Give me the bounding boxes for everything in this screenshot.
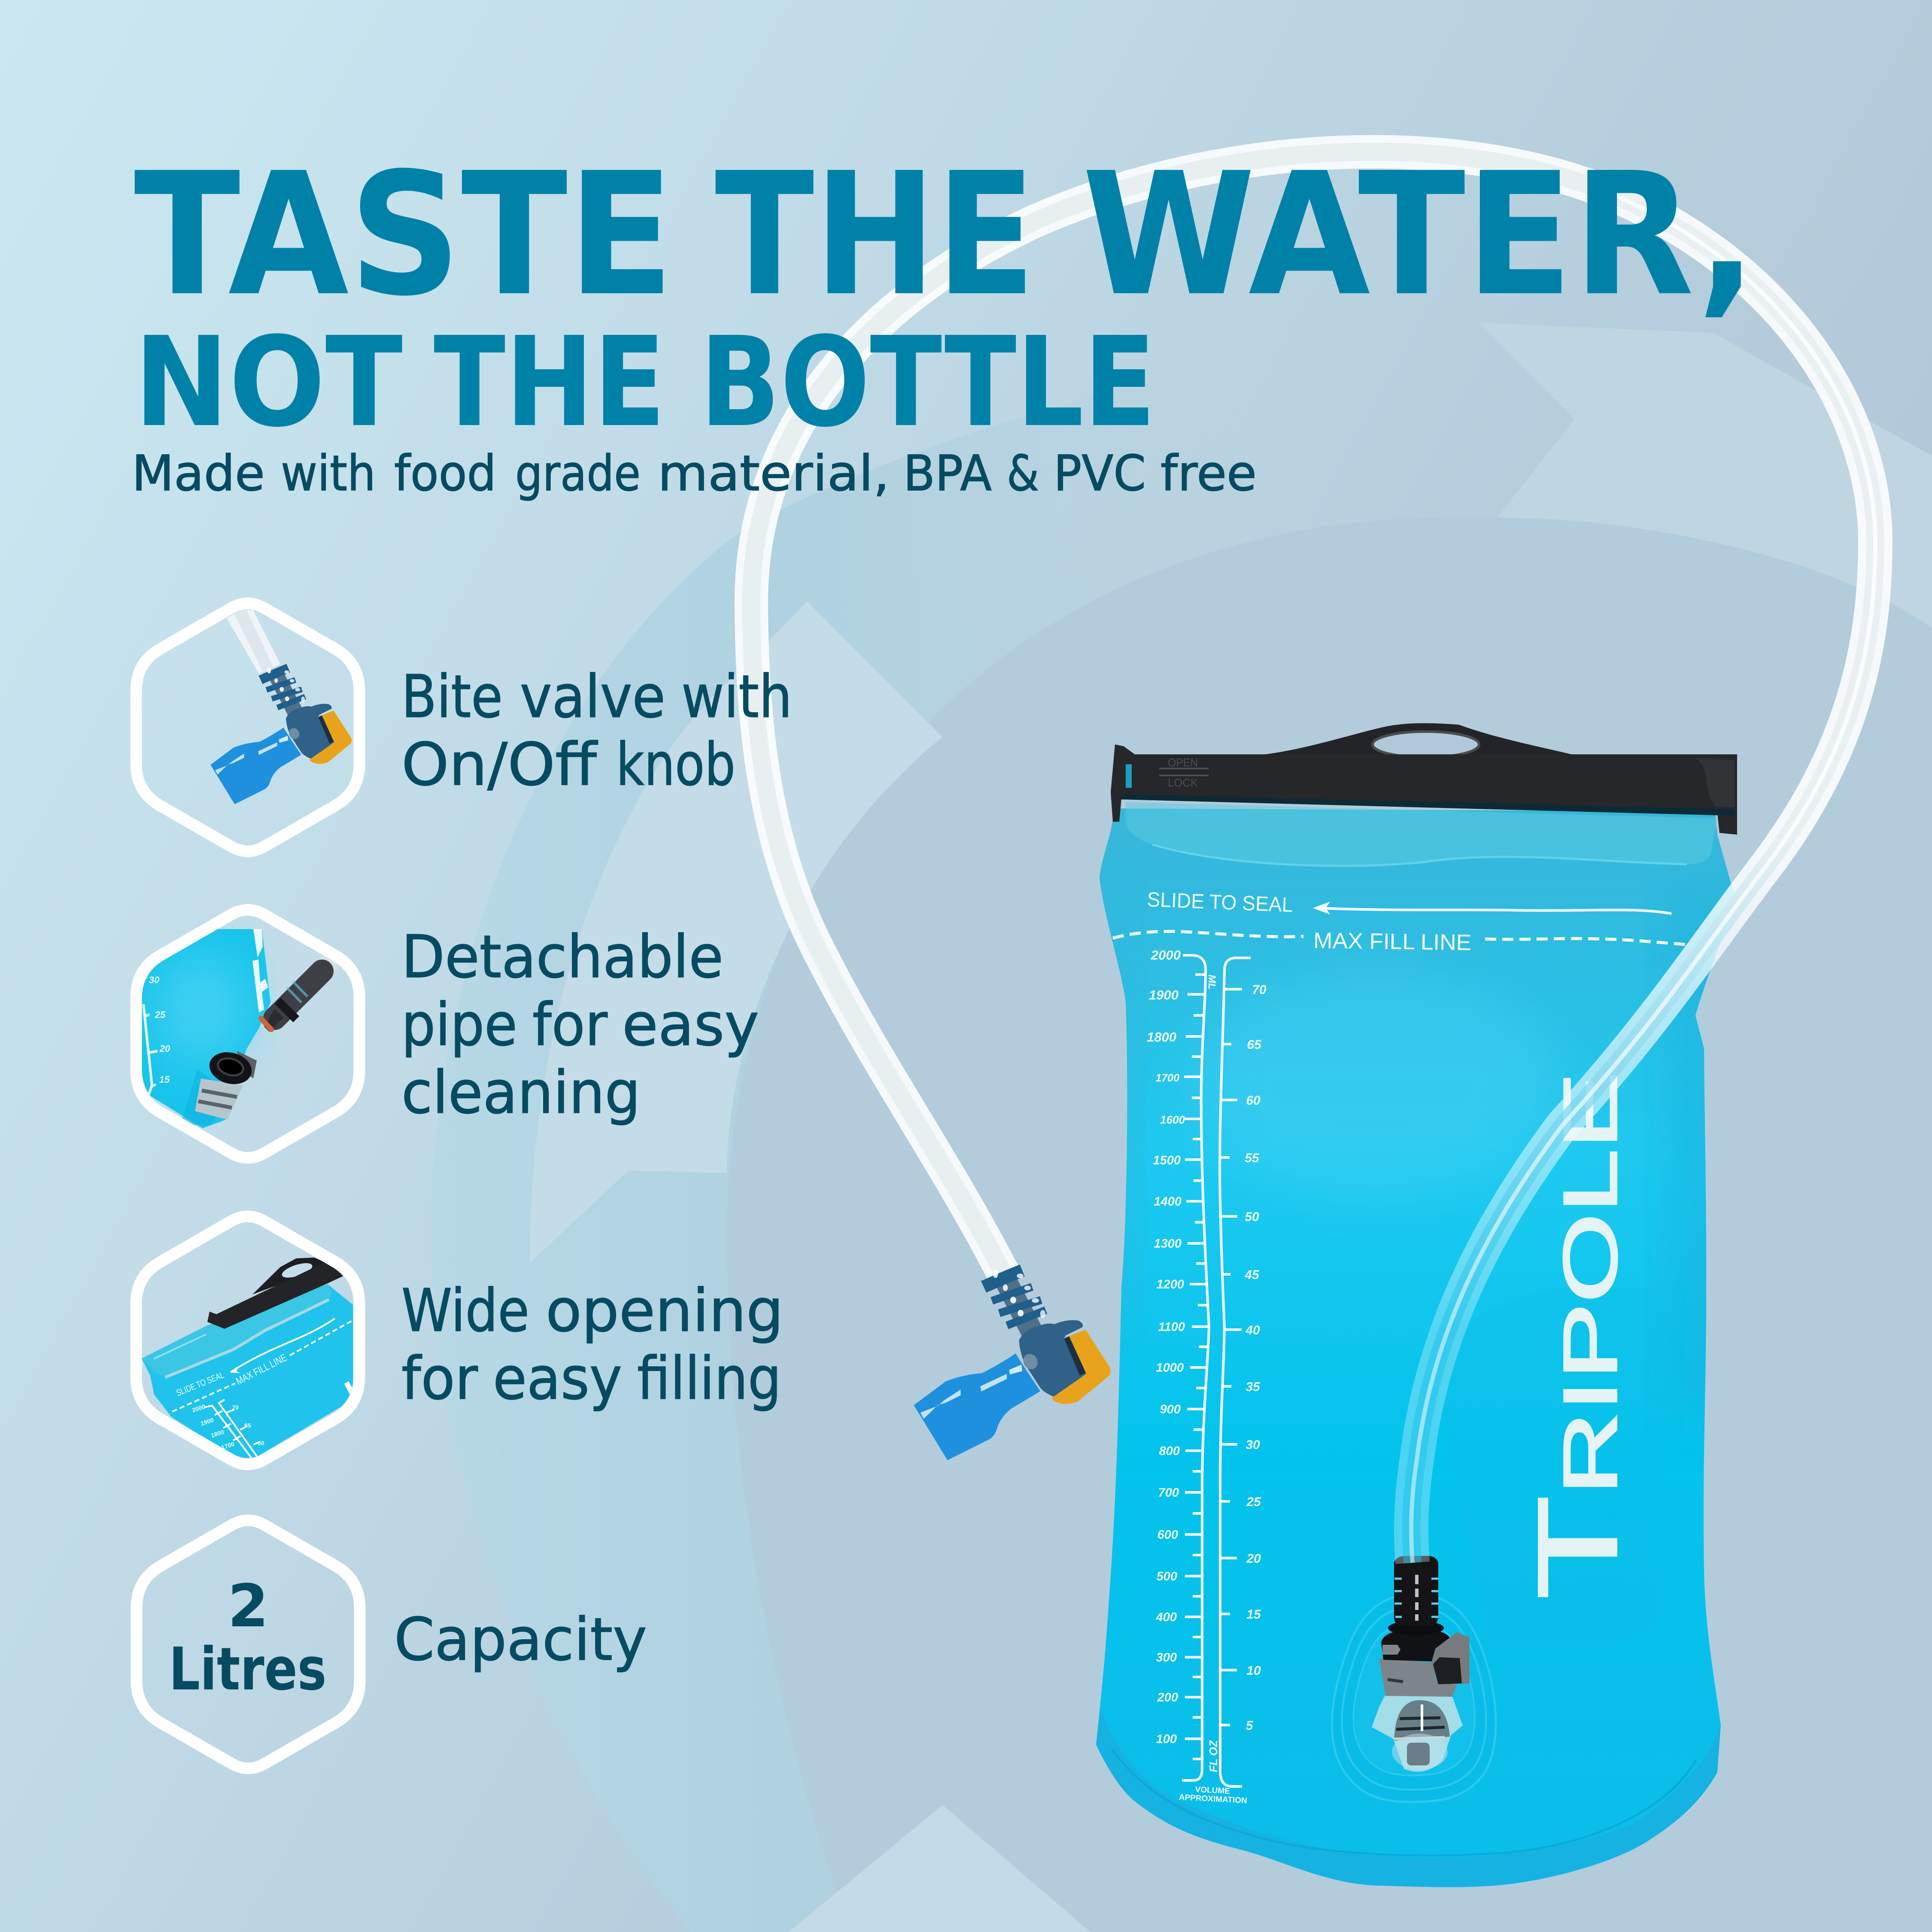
fluid ounce scale: 30 <box>1245 1438 1260 1452</box>
millilitre scale: 1600 <box>1160 1113 1185 1126</box>
millilitre scale: ML <box>1206 975 1218 990</box>
slide to seal label: SLIDE TO SEAL <box>1147 888 1293 917</box>
fluid ounce scale: 55 <box>1245 1151 1260 1165</box>
hexagon icon: wide opening: MAX FILL LINE <box>234 1352 289 1387</box>
feature text: bite valve: valve <box>520 663 665 731</box>
subtitle: PVC <box>1054 445 1146 502</box>
clip open and lock marks: LOCK <box>1168 776 1198 789</box>
drinking tube left section <box>751 152 1610 1275</box>
hexagon icon: wide opening: 1700 <box>220 1440 235 1451</box>
embossed valve seat <box>1332 1594 1496 1802</box>
millilitre scale: 1700 <box>1155 1072 1179 1084</box>
feature text: bite valve: knob <box>616 731 735 799</box>
feature: capacity <box>137 1520 647 1768</box>
hexagon icon: wide opening: 1900 <box>200 1416 215 1427</box>
hexagon icon: detachable pipe: 30 <box>149 975 160 985</box>
feature text: wide opening: easy <box>493 1345 622 1413</box>
millilitre scale: 1100 <box>1158 1320 1185 1334</box>
pouch shading <box>1091 880 1739 1887</box>
feature text: wide opening <box>401 1277 784 1413</box>
feature text: detachable pipe <box>401 923 759 1127</box>
subtitle: grade <box>515 445 641 502</box>
hexagon icon: bite valve <box>136 603 359 851</box>
feature: wide opening <box>136 1216 784 1464</box>
title line one <box>134 136 1757 333</box>
pouch body <box>1096 808 1735 1887</box>
volume approximation note: VOLUME <box>1195 1785 1230 1796</box>
subtitle: BPA <box>903 445 992 502</box>
feature text: detachable pipe: pipe <box>401 991 517 1059</box>
max fill line: MAX FILL LINE <box>1313 928 1472 955</box>
fluid ounce scale: 15 <box>1246 1607 1261 1622</box>
outlet fitting <box>1372 1556 1470 1772</box>
bite valve <box>914 1270 1111 1460</box>
feature text: detachable pipe: easy <box>622 991 759 1059</box>
feature: bite valve <box>136 603 792 851</box>
millilitre scale <box>1147 948 1220 1780</box>
title line two: NOT <box>134 310 403 454</box>
fluid ounce scale: 35 <box>1245 1380 1261 1394</box>
feature text: wide opening: Wide <box>401 1277 529 1345</box>
millilitre scale: 300 <box>1156 1651 1177 1665</box>
fluid ounce scale: 10 <box>1246 1664 1261 1678</box>
max fill line <box>1113 928 1687 955</box>
feature text: detachable pipe: cleaning <box>401 1059 641 1127</box>
hexagon icon: wide opening: 1800 <box>210 1428 225 1439</box>
fluid ounce scale: 25 <box>1246 1495 1261 1509</box>
subtitle: food <box>394 445 496 502</box>
subtitle: free <box>1160 445 1257 502</box>
fluid ounce scale <box>1220 958 1267 1786</box>
slide arrow <box>1313 902 1671 914</box>
millilitre scale: 1400 <box>1154 1195 1182 1209</box>
volume approximation note <box>1179 1785 1247 1805</box>
feature: detachable pipe <box>136 910 759 1158</box>
fluid ounce scale: 5 <box>1246 1719 1254 1733</box>
title <box>134 136 1757 454</box>
hexagon icon: wide opening: SLIDE TO SEAL <box>175 1370 225 1398</box>
millilitre scale: 1500 <box>1153 1154 1181 1167</box>
fluid ounce scale: 50 <box>1245 1210 1259 1224</box>
feature text: bite valve <box>401 663 792 799</box>
feature text: wide opening: filling <box>637 1345 781 1413</box>
fluid ounce scale: 20 <box>1246 1552 1261 1566</box>
millilitre scale: 700 <box>1158 1486 1179 1500</box>
subtitle: with <box>281 445 376 502</box>
title line two: BOTTLE <box>700 310 1156 454</box>
millilitre scale: 2000 <box>1151 948 1181 963</box>
feature text: bite valve: Bite <box>401 663 503 731</box>
clip and handle <box>1111 723 1737 835</box>
brand name: TRIPOLE <box>1514 1072 1640 1600</box>
volume approximation note: APPROXIMATION <box>1179 1793 1247 1805</box>
water reservoir pouch <box>1091 802 1739 1887</box>
title line two <box>134 310 1156 454</box>
millilitre scale: 1900 <box>1149 987 1179 1002</box>
millilitre scale: 1800 <box>1147 1030 1176 1045</box>
feature text: bite valve: On/Off <box>401 731 598 799</box>
millilitre scale: 800 <box>1159 1444 1180 1458</box>
millilitre scale: 900 <box>1160 1403 1181 1416</box>
millilitre scale: 500 <box>1157 1570 1177 1583</box>
fluid ounce scale: 40 <box>1245 1323 1260 1337</box>
millilitre scale: 600 <box>1157 1528 1178 1542</box>
feature text: wide opening: opening <box>546 1277 784 1345</box>
subtitle: material, <box>658 445 890 502</box>
hexagon icon: wide opening: 60 <box>258 1440 264 1446</box>
millilitre scale: 1000 <box>1156 1361 1184 1375</box>
hexagon icon: detachable pipe: 25 <box>155 1009 166 1020</box>
fluid ounce scale: 45 <box>1244 1268 1260 1282</box>
subtitle: & <box>1007 445 1039 502</box>
clip open and lock marks <box>1168 756 1198 789</box>
fluid ounce scale: 70 <box>1252 983 1267 997</box>
feature text: wide opening: for <box>401 1345 478 1413</box>
subtitle: Made <box>132 445 265 502</box>
millilitre scale: 200 <box>1157 1691 1178 1704</box>
drinking tube right section <box>1411 193 1875 1563</box>
title line one: WATER, <box>1082 136 1757 333</box>
subtitle <box>132 445 1257 502</box>
hexagon icon: detachable pipe <box>136 910 359 1158</box>
hexagon icon: wide opening: 65 <box>244 1422 251 1429</box>
hexagon icon: wide opening: 2000 <box>191 1403 206 1414</box>
hexagon icon: wide opening: 70 <box>232 1404 239 1411</box>
title line one: THE <box>715 136 1036 333</box>
clip open and lock marks: OPEN <box>1168 756 1198 769</box>
feature text: detachable pipe: for <box>532 991 608 1059</box>
millilitre scale: 1300 <box>1154 1237 1182 1251</box>
fluid ounce scale: 65 <box>1247 1038 1262 1052</box>
hexagon badge: 2 litres: Litres <box>169 1635 326 1704</box>
millilitre scale: 400 <box>1156 1610 1177 1624</box>
millilitre scale: 100 <box>1156 1732 1177 1746</box>
hexagon icon: detachable pipe: 20 <box>159 1043 170 1054</box>
title line one: TASTE <box>134 136 674 333</box>
hexagon icon: wide opening <box>136 1216 359 1464</box>
millilitre scale: 1200 <box>1156 1278 1184 1291</box>
sealing flap <box>1126 802 1717 866</box>
title line two: THE <box>434 310 665 454</box>
hexagon icon: detachable pipe: 15 <box>159 1074 170 1085</box>
fluid ounce scale: 60 <box>1246 1094 1261 1108</box>
hexagon badge: 2 litres: 2 <box>228 1572 269 1640</box>
hexagon badge: 2 litres <box>137 1520 360 1768</box>
feature text: bite valve: with <box>681 663 792 731</box>
feature text: detachable pipe: Detachable <box>401 923 723 991</box>
feature text: capacity: Capacity <box>394 1606 647 1674</box>
millilitre scale: FL OZ <box>1207 1740 1220 1772</box>
